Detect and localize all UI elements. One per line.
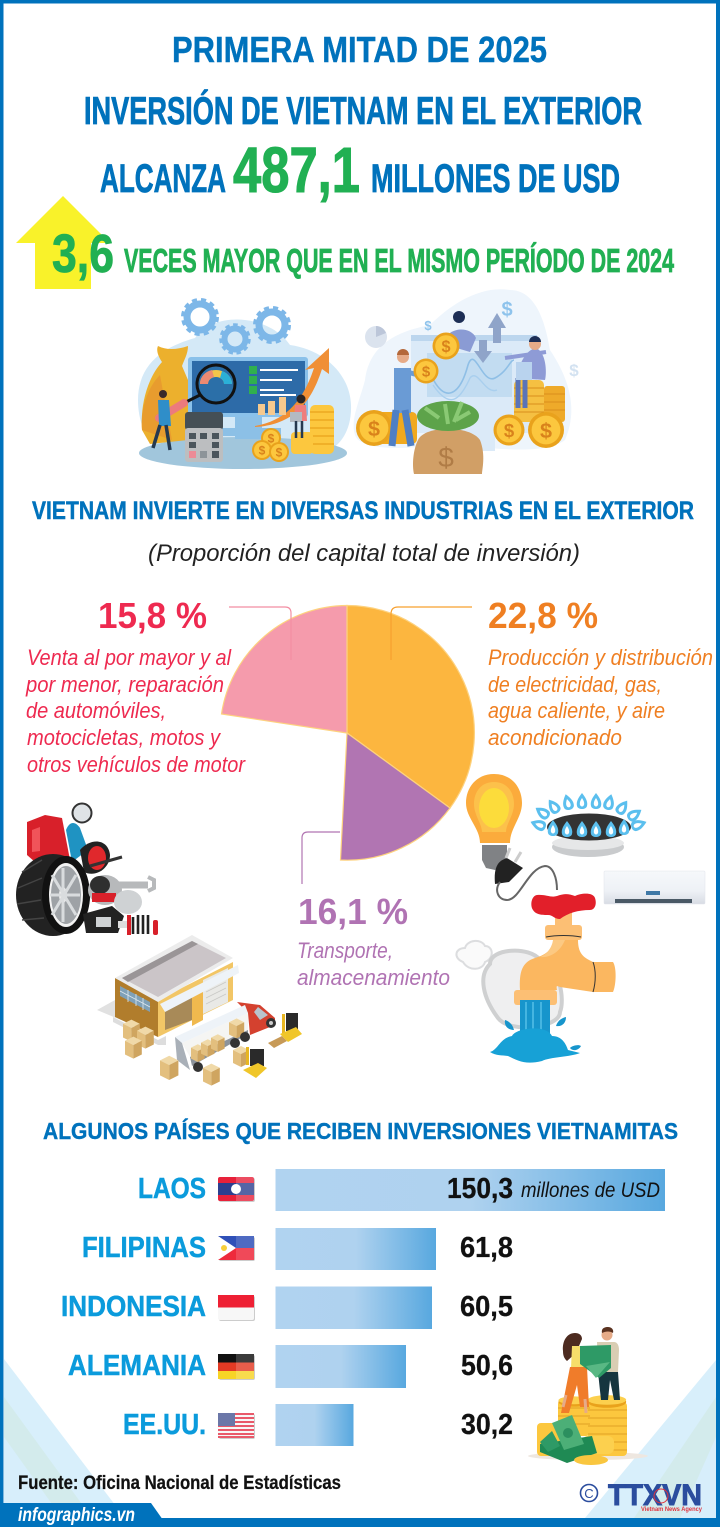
- logo: TTXVN: TTXVN: [608, 1479, 702, 1512]
- callout: 16,1 percent transport: almacenamiento: [297, 965, 450, 990]
- row: Filipinas: [82, 1228, 513, 1270]
- callout: 15,8 percent retail: [25, 595, 247, 777]
- illustration: analytics monitor with gears, coins and bag: [138, 300, 351, 469]
- illustration: investors with coins and money bag: [354, 289, 579, 474]
- illustration: investors with coins and money bag: $: [438, 442, 454, 473]
- callout: 22,8 percent energy: de electricidad, gas,: [488, 672, 662, 697]
- subtitle: 3,6 times larger: [52, 224, 674, 284]
- row: Laos: millones de USD: [521, 1179, 660, 1202]
- subtitle: 3,6 times larger: 3,6: [52, 224, 114, 284]
- row: Indonesia: [61, 1286, 513, 1329]
- source note: Fuente: Oficina Nacional de Estadísticas: [18, 1473, 341, 1494]
- illustration: investors with coins and money bag: $: [569, 361, 579, 380]
- callout: 16,1 percent transport: 16,1 %: [298, 891, 408, 932]
- icon: auto parts: [16, 804, 158, 936]
- leader line: purple: [302, 832, 340, 884]
- row: EE.UU.: EE.UU.: [123, 1409, 206, 1441]
- callout: 22,8 percent energy: agua caliente, y aire: [488, 698, 665, 723]
- callout: 16,1 percent transport: Transporte,: [297, 938, 393, 963]
- decorative corner triangles right: [585, 1360, 716, 1518]
- callout: 15,8 percent retail: otros vehículos de motor: [27, 752, 247, 777]
- icon: air conditioner: [604, 871, 705, 904]
- title: 487,1: [233, 134, 360, 206]
- illustration: investors with coins and money bag: $: [424, 318, 432, 333]
- row: EE.UU.: 30,2: [461, 1409, 513, 1441]
- row: Alemania: 50,6: [461, 1350, 513, 1382]
- callout: 22,8 percent energy: [488, 595, 713, 750]
- callout: 22,8 percent energy: acondicionado: [488, 725, 622, 750]
- logo: TTXVN: Vietnam News Agency: [641, 1506, 702, 1513]
- row: Indonesia: INDONESIA: [61, 1291, 206, 1323]
- title: [84, 29, 642, 206]
- callout: 15,8 percent retail: de automóviles,: [26, 698, 166, 723]
- callout: 16,1 percent transport: [297, 891, 450, 990]
- row: Indonesia: 60,5: [460, 1291, 513, 1323]
- leader line: orange: [391, 607, 472, 660]
- row: Alemania: ALEMANIA: [68, 1350, 206, 1382]
- icon: gas burner: [529, 793, 648, 857]
- row: Laos: [138, 1169, 665, 1211]
- title: ALCANZA: [100, 157, 226, 201]
- leader line: pink: [229, 607, 291, 660]
- row: Alemania: [68, 1345, 513, 1388]
- callout: 15,8 percent retail: 15,8 %: [98, 595, 207, 636]
- icon: light bulb with plug: [466, 774, 557, 900]
- icon: yellow up arrow: [16, 196, 110, 289]
- logo: TTXVN: C: [584, 1486, 594, 1501]
- illustration: investors with coins and money bag: $: [501, 299, 513, 321]
- callout: 15,8 percent retail: motocicletas, motos y: [27, 725, 222, 750]
- row: Laos: 150,3: [447, 1173, 513, 1205]
- icon: couple on coin stacks with money: [528, 1327, 648, 1465]
- row: EE.UU.: [123, 1404, 513, 1446]
- row: Filipinas: 61,8: [460, 1232, 513, 1264]
- footer tab: infographics.vn: [18, 1505, 135, 1526]
- row: Filipinas: FILIPINAS: [82, 1232, 206, 1264]
- pie chart: [222, 606, 474, 860]
- bar chart: countries: [61, 1169, 665, 1446]
- decorative corner triangles left: [4, 1359, 125, 1518]
- callout: 15,8 percent retail: Venta al por mayor y al: [27, 645, 232, 670]
- subheading: capital share: (Proporción del capital total de inversión): [148, 540, 580, 567]
- callout: 22,8 percent energy: 22,8 %: [488, 595, 598, 636]
- heading: recipient countries: ALGUNOS PAÍSES QUE RECIBEN INVERSIONES VIETNAMITAS: [43, 1117, 678, 1144]
- title: PRIMERA MITAD DE 2025: [172, 29, 547, 70]
- row: Laos: LAOS: [138, 1173, 206, 1205]
- callout: 15,8 percent retail: por menor, reparación: [25, 672, 224, 697]
- icon: water tap with steam: [456, 894, 616, 1063]
- icon: warehouse and truck: [97, 935, 302, 1086]
